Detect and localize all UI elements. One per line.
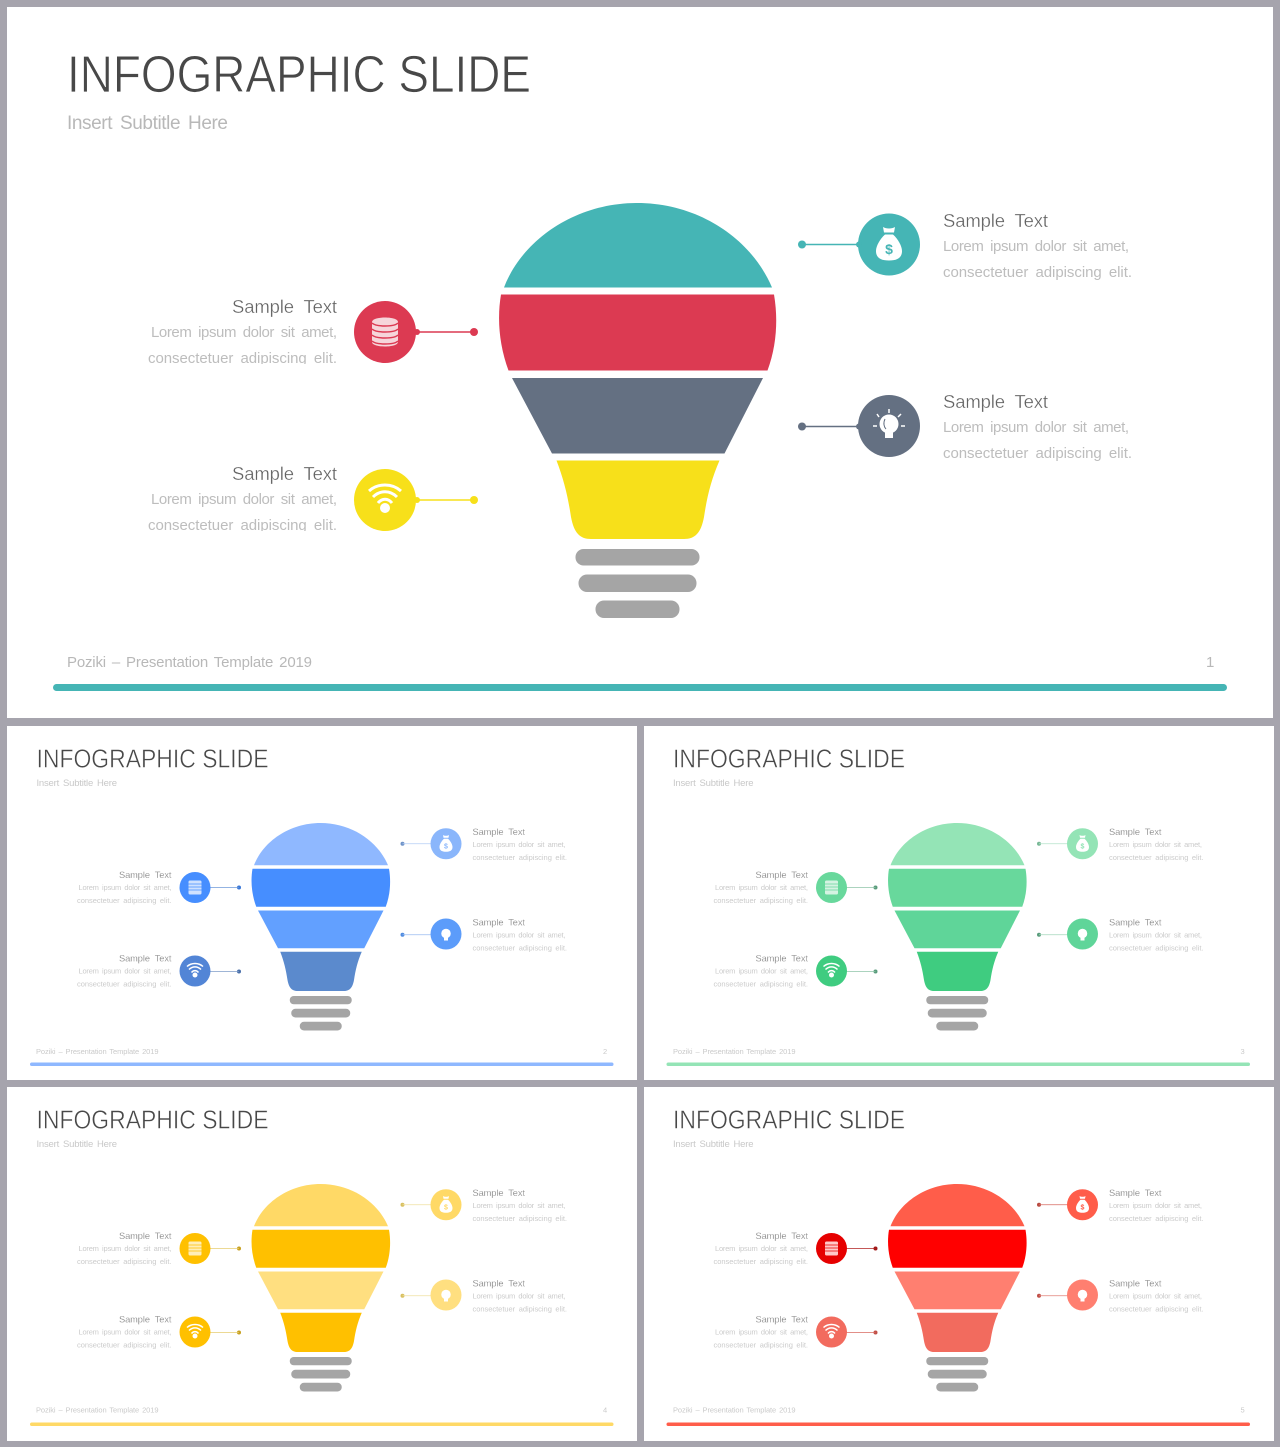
callout: lower right: consectetuer adipiscing elit. <box>472 944 567 952</box>
callout: upper left: Lorem ipsum dolor sit amet, <box>78 883 172 892</box>
subtitle: Insert Subtitle Here <box>67 113 228 134</box>
footer bar <box>666 1062 1250 1066</box>
callout: top right <box>1037 1188 1204 1223</box>
callout: upper left: consectetuer adipiscing elit. <box>77 1257 172 1266</box>
title: INFOGRAPHIC SLIDE <box>36 744 268 774</box>
footer bar <box>30 1422 614 1426</box>
callout: lower right: Lorem ipsum dolor sit amet, <box>1109 930 1202 940</box>
callout: lower left: consectetuer adipiscing elit. <box>77 980 172 988</box>
footer text: Poziki – Presentation Template 2019 <box>36 1047 158 1056</box>
footer bar <box>666 1422 1250 1426</box>
callout: lower right <box>1037 918 1204 952</box>
callout: lower left <box>714 1314 878 1350</box>
panel: yellow slide <box>7 1087 637 1441</box>
callout: lower left <box>714 954 878 988</box>
callout: top right: consectetuer adipiscing elit. <box>1109 853 1204 862</box>
callout: top right: consectetuer adipiscing elit. <box>472 1214 567 1223</box>
subtitle: Insert Subtitle Here <box>36 1139 117 1150</box>
callout: lower right: Lorem ipsum dolor sit amet, <box>472 930 566 940</box>
footer text: Poziki – Presentation Template 2019 <box>67 654 312 671</box>
page number: 1 <box>1206 654 1214 671</box>
callout: upper left: consectetuer adipiscing elit. <box>148 350 337 367</box>
footer text: Poziki – Presentation Template 2019 <box>673 1406 796 1414</box>
callout: lower right: consectetuer adipiscing elit. <box>943 445 1132 462</box>
callout: lower right: Sample Text <box>472 1278 525 1288</box>
callout: lower right: Sample Text <box>1109 918 1162 928</box>
callout: top right: Lorem ipsum dolor sit amet, <box>472 1201 566 1210</box>
callout: upper left: Sample Text <box>119 870 172 880</box>
panel: main slide <box>7 7 1273 718</box>
callout: top right: Sample Text <box>1109 1188 1162 1198</box>
callout: top right: $ <box>885 241 893 257</box>
title: INFOGRAPHIC SLIDE <box>36 1104 268 1134</box>
callout: lower left: consectetuer adipiscing elit. <box>77 1340 172 1350</box>
callout: lower left: Lorem ipsum dolor sit amet, <box>715 966 808 976</box>
callout: lower left: Sample Text <box>756 954 808 964</box>
panel: blue slide <box>7 726 637 1080</box>
callout: top right: $ <box>444 844 448 850</box>
page number: 2 <box>603 1047 607 1056</box>
callout: top right: $ <box>444 1204 448 1212</box>
callout: top right: $ <box>1081 844 1085 850</box>
callout: top right: consectetuer adipiscing elit. <box>472 853 567 862</box>
page number: 4 <box>603 1406 607 1414</box>
callout: lower left: Lorem ipsum dolor sit amet, <box>78 966 172 976</box>
title: INFOGRAPHIC SLIDE <box>67 46 531 104</box>
callout: upper left: Lorem ipsum dolor sit amet, <box>78 1244 172 1253</box>
footer text: Poziki – Presentation Template 2019 <box>36 1406 158 1414</box>
callout: lower left: Sample Text <box>232 463 337 484</box>
callout: top right <box>400 1188 567 1223</box>
page number: 3 <box>1240 1047 1245 1056</box>
callout: lower right: Lorem ipsum dolor sit amet, <box>943 419 1129 436</box>
footer bar <box>30 1062 614 1066</box>
panel: green slide <box>644 726 1274 1080</box>
callout: lower right: consectetuer adipiscing elit. <box>1109 1304 1204 1314</box>
callout: top right: consectetuer adipiscing elit. <box>943 264 1132 281</box>
callout: top right <box>798 210 1132 281</box>
callout: upper left: consectetuer adipiscing elit. <box>714 896 808 905</box>
callout: lower left <box>77 954 241 988</box>
callout: lower left: consectetuer adipiscing elit. <box>714 1340 808 1350</box>
callout: lower right: Sample Text <box>472 918 525 928</box>
callout: lower right <box>798 391 1132 462</box>
callout: top right: Lorem ipsum dolor sit amet, <box>472 840 566 849</box>
callout: lower right <box>400 1278 567 1314</box>
light bulb chart <box>888 823 1027 1030</box>
subtitle: Insert Subtitle Here <box>673 1139 754 1150</box>
callout: lower left <box>77 1314 241 1350</box>
light bulb chart <box>252 1184 390 1392</box>
page number: 5 <box>1240 1406 1245 1414</box>
callout: upper left: Sample Text <box>756 1231 808 1241</box>
callout: lower left: Lorem ipsum dolor sit amet, <box>715 1328 808 1336</box>
callout: upper left: Lorem ipsum dolor sit amet, <box>715 1244 808 1253</box>
callout: top right: consectetuer adipiscing elit. <box>1109 1214 1204 1223</box>
callout: upper left: Sample Text <box>119 1231 172 1241</box>
light bulb chart <box>888 1184 1027 1392</box>
callout: lower right: Lorem ipsum dolor sit amet, <box>1109 1292 1202 1300</box>
callout: lower left: Lorem ipsum dolor sit amet, <box>151 491 337 508</box>
light bulb chart <box>499 203 776 618</box>
callout: lower left: Sample Text <box>119 1314 172 1324</box>
callout: lower right <box>400 918 567 952</box>
footer text: Poziki – Presentation Template 2019 <box>673 1047 796 1056</box>
subtitle: Insert Subtitle Here <box>673 778 754 789</box>
callout: upper left: Lorem ipsum dolor sit amet, <box>715 883 808 892</box>
callout: upper left: Sample Text <box>756 870 808 880</box>
callout: top right <box>1037 827 1204 862</box>
callout: upper left: consectetuer adipiscing elit. <box>77 896 172 905</box>
callout: top right: $ <box>1081 1204 1085 1212</box>
callout: lower right: consectetuer adipiscing elit. <box>1109 944 1204 952</box>
callout: top right: Lorem ipsum dolor sit amet, <box>1109 1201 1202 1210</box>
callout: upper left <box>714 870 878 905</box>
title: INFOGRAPHIC SLIDE <box>673 1104 905 1134</box>
callout: top right: Sample Text <box>472 1188 525 1198</box>
light bulb chart <box>252 823 390 1030</box>
callout: top right: Sample Text <box>472 827 525 837</box>
callout: upper left: Lorem ipsum dolor sit amet, <box>151 324 337 341</box>
callout: upper left <box>714 1231 878 1266</box>
callout: upper left <box>77 870 241 905</box>
footer bar <box>53 684 1227 691</box>
callout: lower left: Lorem ipsum dolor sit amet, <box>78 1328 172 1336</box>
callout: upper left <box>145 296 478 370</box>
callout: upper left <box>77 1231 241 1266</box>
callout: top right: Sample Text <box>1109 827 1162 837</box>
callout: lower left: Sample Text <box>119 954 172 964</box>
callout: top right: Lorem ipsum dolor sit amet, <box>943 238 1129 255</box>
subtitle: Insert Subtitle Here <box>36 778 117 789</box>
callout: lower right: Lorem ipsum dolor sit amet, <box>472 1292 566 1300</box>
callout: lower right <box>1037 1278 1204 1314</box>
callout: upper left: Sample Text <box>232 296 337 317</box>
panel: red slide <box>644 1087 1274 1441</box>
callout: lower left <box>145 463 478 537</box>
callout: lower right: Sample Text <box>943 391 1048 412</box>
title: INFOGRAPHIC SLIDE <box>673 744 905 774</box>
callout: lower left: Sample Text <box>756 1314 808 1324</box>
callout: top right: Sample Text <box>943 210 1048 231</box>
callout: lower right: consectetuer adipiscing elit. <box>472 1304 567 1314</box>
callout: lower right: Sample Text <box>1109 1278 1162 1288</box>
callout: lower left: consectetuer adipiscing elit. <box>714 980 808 988</box>
callout: top right <box>400 827 567 862</box>
callout: lower left: consectetuer adipiscing elit. <box>148 517 337 534</box>
callout: upper left: consectetuer adipiscing elit. <box>714 1257 808 1266</box>
callout: top right: Lorem ipsum dolor sit amet, <box>1109 840 1202 849</box>
